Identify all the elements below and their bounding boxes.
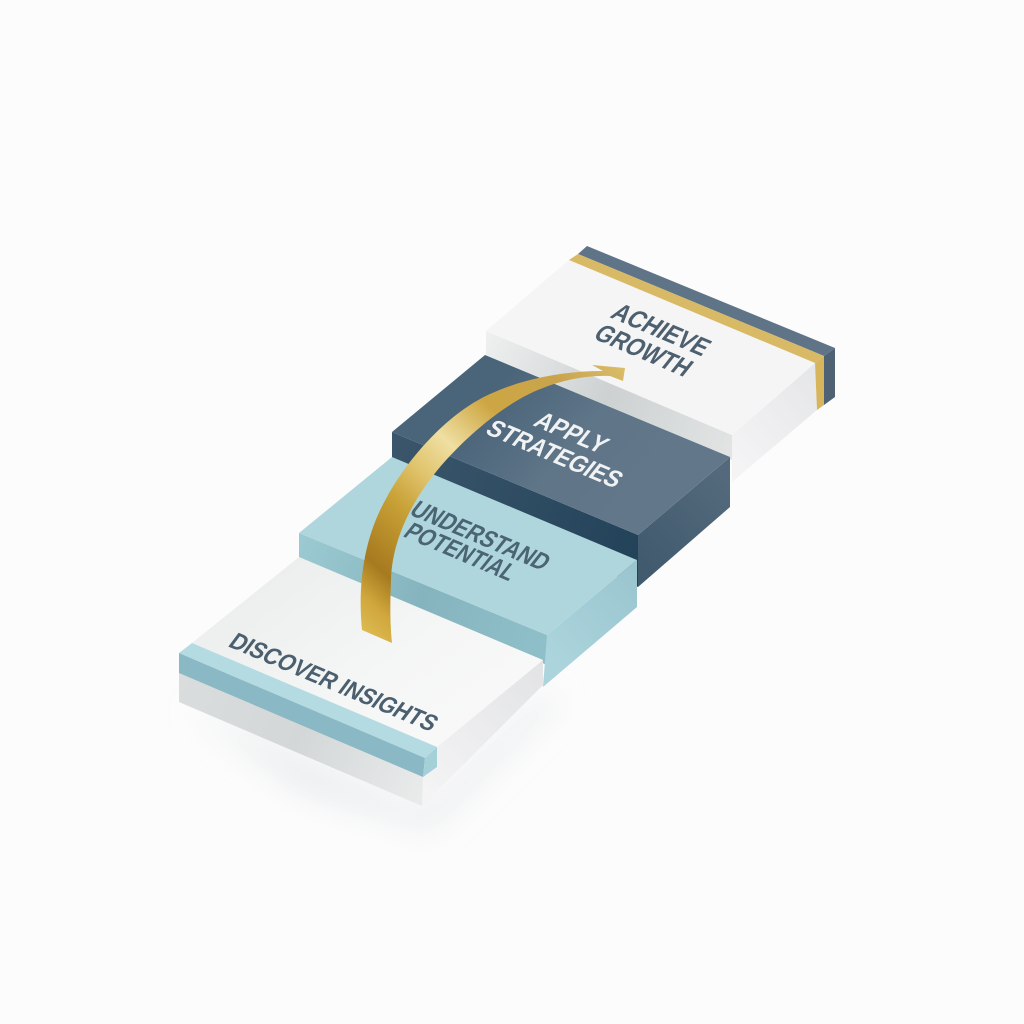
teal band bbox=[179, 643, 437, 758]
label: achieve growth: GROWTH bbox=[588, 319, 699, 382]
label: understand potential: UNDERSTAND bbox=[404, 497, 556, 576]
label: achieve growth bbox=[588, 298, 717, 382]
gold band bbox=[569, 254, 824, 363]
label: discover insights: DISCOVER INSIGHTS bbox=[223, 628, 444, 737]
label: apply strategies: STRATEGIES bbox=[480, 416, 628, 493]
step 3: apply strategies bbox=[392, 355, 730, 587]
top face bbox=[299, 457, 637, 635]
step 1: discover insights bbox=[179, 557, 543, 806]
top face bbox=[192, 557, 543, 747]
top face bbox=[486, 260, 815, 435]
step 4: achieve growth bbox=[486, 246, 835, 482]
top face bbox=[392, 355, 730, 535]
label: understand potential: POTENTIAL bbox=[398, 519, 522, 586]
step 2: understand potential bbox=[299, 457, 637, 687]
label: achieve growth: ACHIEVE bbox=[605, 298, 717, 361]
arrow: gold ribbon rising from step 1 to step 4 bbox=[361, 365, 625, 643]
label: apply strategies: APPLY bbox=[528, 408, 614, 459]
navy band bbox=[578, 246, 835, 356]
